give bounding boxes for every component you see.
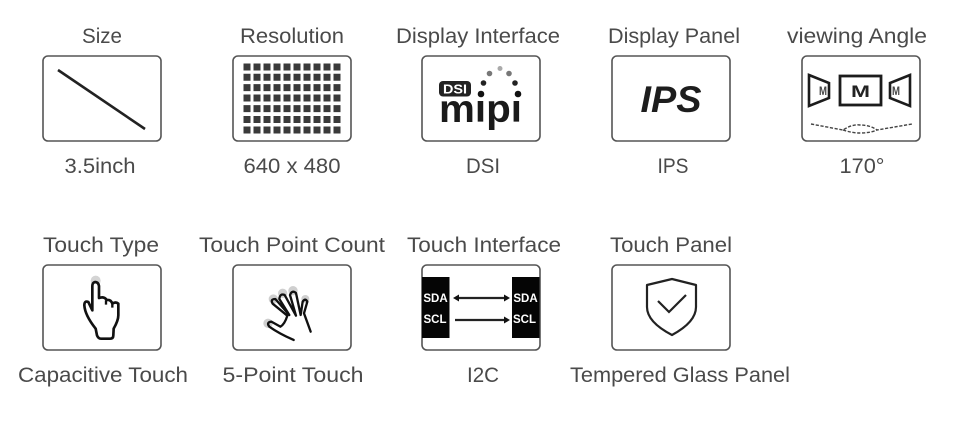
value: touch point count: 5-Point Touch: [222, 364, 364, 387]
icon: I2C connection diagram: [422, 277, 540, 338]
panel: resolution: [233, 25, 351, 178]
value: resolution: 640 x 480: [244, 155, 340, 178]
value: viewing angle: 170°: [840, 155, 884, 178]
icon: mipi dsi logo: mipi: [439, 88, 522, 131]
heading: size: Size: [82, 25, 122, 48]
panel: viewing angle: [787, 25, 927, 178]
panel: touch panel: [570, 234, 790, 387]
icon: mipi dsi logo: DSI: [443, 82, 467, 96]
heading: viewing angle: viewing Angle: [787, 25, 927, 48]
heading: touch panel: Touch Panel: [610, 234, 732, 257]
value: touch panel: Tempered Glass Panel: [570, 364, 790, 387]
icon: viewing angle screens: M: [892, 84, 900, 98]
value: display interface: DSI: [466, 155, 500, 178]
icon: I2C connection diagram: SDA: [423, 293, 448, 305]
icon: viewing angle screens: M: [851, 82, 870, 101]
value: size: 3.5inch: [64, 155, 136, 178]
value: touch interface: I2C: [467, 364, 499, 387]
icon: five-finger hand: [263, 286, 311, 340]
value: touch type: Capacitive Touch: [18, 364, 188, 387]
icon: pointing hand: [84, 276, 118, 339]
icon: mipi dsi logo: [439, 66, 523, 131]
icon: diagonal line: [58, 70, 145, 129]
panel: size: [43, 25, 161, 178]
icon: viewing angle screens: [809, 75, 912, 133]
icon: I2C connection diagram: SCL: [513, 314, 536, 326]
panel: touch point count: [199, 234, 385, 387]
panel: display interface: [396, 25, 560, 178]
icon: pixel grid: [244, 67, 341, 130]
icon: shield with check: [647, 279, 696, 335]
value: display panel: IPS: [658, 155, 688, 178]
heading: display panel: Display Panel: [608, 25, 740, 48]
panel: touch interface: [407, 234, 561, 387]
icon: I2C connection diagram: SCL: [424, 314, 446, 326]
icon: IPS mark: IPS: [640, 79, 702, 120]
heading: touch type: Touch Type: [43, 234, 159, 257]
heading: display interface: Display Interface: [396, 25, 560, 48]
icon: I2C connection diagram: SDA: [513, 293, 538, 305]
heading: resolution: Resolution: [240, 25, 344, 48]
heading: touch interface: Touch Interface: [407, 234, 561, 257]
panel: touch type: [18, 234, 188, 387]
panel: display panel: [608, 25, 740, 178]
icon: viewing angle screens: M: [819, 84, 827, 98]
heading: touch point count: Touch Point Count: [199, 234, 385, 257]
